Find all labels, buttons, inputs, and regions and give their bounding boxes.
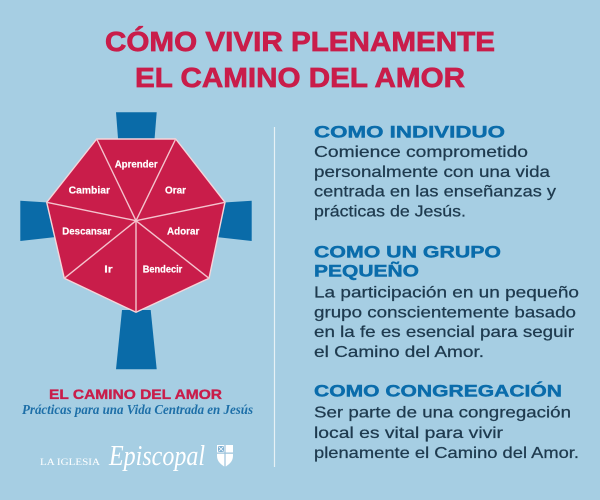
title: EL CAMINO DEL AMOR — [135, 62, 465, 93]
title — [105, 26, 495, 93]
text block: como individuo — [314, 124, 556, 221]
text block: como congregación — [314, 382, 579, 462]
text block: como un grupo pequeño: en la fe es esencial para seguir — [314, 324, 574, 341]
text block: como un grupo pequeño: grupo conscientemente basado — [314, 304, 576, 321]
segment labels: Descansar — [62, 226, 111, 237]
text block: como individuo: COMO INDIVIDUO — [314, 124, 505, 142]
caption: El Camino del Amor — [22, 386, 253, 417]
segment labels: Aprender — [115, 160, 158, 171]
divider — [274, 127, 276, 467]
heptagon diagram: seven practices — [47, 139, 225, 312]
text block: como un grupo pequeño — [314, 244, 579, 361]
segment labels: Orar — [165, 186, 186, 197]
text block: como un grupo pequeño: La participación en un pequeño — [314, 284, 579, 301]
text block: como un grupo pequeño: COMO UN GRUPO — [314, 244, 501, 262]
text block: como congregación: plenamente el Camino del Amor. — [314, 445, 579, 462]
segment labels — [62, 160, 199, 276]
segment labels: Bendecir — [143, 265, 182, 276]
caption: El Camino del Amor: EL CAMINO DEL AMOR — [49, 386, 222, 402]
caption: El Camino del Amor: Prácticas para una Vida Centrada en Jesús — [22, 402, 253, 417]
text block: como individuo: personalmente con una vida — [314, 164, 550, 181]
text block: como congregación: COMO CONGREGACIÓN — [314, 382, 562, 401]
logo: La Iglesia Episcopal: Episcopal — [108, 441, 205, 472]
segment labels: Ir — [104, 265, 113, 276]
title: CÓMO VIVIR PLENAMENTE — [105, 26, 495, 57]
text block: como individuo: centrada en las enseñanzas y — [314, 184, 556, 201]
text block: como un grupo pequeño: el Camino del Amor. — [314, 344, 484, 361]
segment labels: Cambiar — [69, 186, 110, 197]
text block: como congregación: Ser parte de una congregación — [314, 405, 571, 422]
logo: La Iglesia Episcopal — [40, 441, 233, 472]
icon: episcopal shield — [217, 445, 233, 467]
text block: como individuo: prácticas de Jesús. — [314, 204, 466, 221]
logo: La Iglesia Episcopal: LA IGLESIA — [40, 458, 100, 468]
segment labels: Adorar — [167, 226, 199, 237]
text block: como individuo: Comience comprometido — [314, 144, 528, 161]
text block: como congregación: local es vital para vivir — [314, 425, 503, 442]
text block: como un grupo pequeño: PEQUEÑO — [314, 261, 419, 281]
heptagon shape — [47, 139, 225, 312]
icon: blue cross behind heptagon — [20, 112, 252, 369]
